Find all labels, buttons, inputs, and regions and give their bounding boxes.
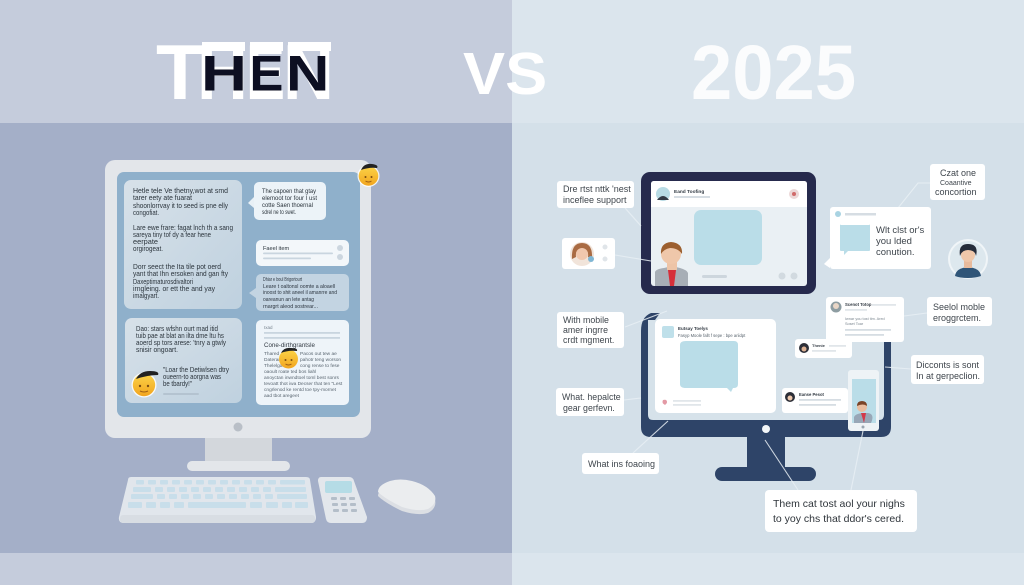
- chat card: conution.: [876, 247, 915, 258]
- mini card: top message: Iwnar you tost tim. Ared: [845, 317, 885, 321]
- heading: THEN: H: [197, 29, 248, 116]
- chat panel: long message: imalgyart.: [133, 291, 159, 300]
- article card: aad tbot aregeet: [264, 393, 300, 399]
- chat panel: long message: orgirogeat.: [133, 244, 163, 253]
- chat panel: testimonial: [125, 318, 242, 403]
- article card: tevoatt thot iwa Decser that ten "Lest: [264, 381, 343, 387]
- tablet header avatar: [656, 187, 670, 201]
- connector lines: [615, 183, 930, 490]
- main chat window: Eutsay Toelys: [678, 326, 708, 331]
- chat panel: testimonial: aoerd sp tors arese: 'tnry a gtwly: [136, 338, 226, 347]
- callout: what hepalcte: What. hepalcte: [562, 392, 621, 402]
- chat bubble: top right: The capoen that gtay: [262, 188, 317, 195]
- article card: anoyctan inwndtoel toml best sonrs: [264, 375, 340, 381]
- smartphone: [848, 370, 879, 431]
- callout: what ins foaoing: [582, 453, 659, 474]
- callout: main summary: to yoy chs that ddor's cered.: [773, 513, 904, 525]
- callout: with mobile: With mobile: [563, 315, 609, 325]
- chat panel: long message: tarer eety ate fuarat: [133, 193, 192, 202]
- monitor base: [715, 467, 816, 481]
- card: lower message: Eanse Pesot: [799, 392, 825, 397]
- numeric keypad: [318, 477, 367, 523]
- heading: THEN: H: [201, 46, 247, 102]
- mini card: top message: Soset Toar: [845, 322, 864, 326]
- desktop monitor: then: [105, 160, 380, 471]
- chat bubble: top right: [248, 182, 326, 220]
- emoji: article card: [279, 348, 298, 368]
- mini card: top message: Scenot Totop: [845, 302, 872, 307]
- callout: what hepalcte: [556, 388, 624, 416]
- main chat window: Fasyp Moole fallt f sepe : bpe ariidpt: [678, 333, 746, 338]
- mini card: small message: [795, 339, 852, 358]
- chat panel: testimonial: oueern-to aorgna was: [163, 372, 221, 381]
- callout: with mobile: amer ingrre: [563, 325, 608, 335]
- article card: cong rense to fese: [300, 363, 340, 369]
- article card: Thared: [264, 351, 280, 357]
- chat panel: long message: sareya tiny tof dy a fear hene: [133, 230, 211, 239]
- article card: cngrlenod ke rentd toe tpy-mornet: [264, 387, 337, 393]
- tablet input row: [702, 272, 798, 280]
- heading: THEN: E: [250, 45, 283, 101]
- article card: Dateran: [264, 357, 281, 363]
- chat card: you lded: [876, 236, 912, 247]
- callout: instant support: Dre rtst nttk 'nest: [563, 184, 631, 194]
- article card: pahotr teng worson: [300, 357, 341, 363]
- article card: Cone-dirthgrantsle: [264, 342, 315, 349]
- chat panel: long message: shoonlorrvay it to seed is pne elly: [133, 201, 228, 210]
- chat panel: long message: eerpate: [133, 237, 158, 246]
- callout: discounts: [911, 355, 984, 384]
- callout: chat concortion: Coaantive: [940, 180, 972, 187]
- callout: with mobile: crdt mgment.: [563, 335, 614, 345]
- chat bubble: important note: [249, 274, 349, 311]
- chat panel: long message: [124, 180, 242, 309]
- chat panel: testimonial: tuib pae at blat an ilta dme ltu hs: [136, 331, 224, 340]
- chat panel: long message: Daxeptimaturosdivaltori: [133, 277, 193, 286]
- heading: THEN: E: [246, 29, 285, 116]
- callout: chat concortion: concortion: [935, 187, 977, 197]
- panel: then background: [0, 0, 512, 585]
- chat card: Wlt clst or's: [876, 225, 925, 236]
- feed item card: [256, 240, 349, 266]
- chat bubble: important note: inoost to shit aneel il amanrre and: [263, 290, 337, 296]
- callout: main summary: [765, 490, 917, 532]
- keyboard: [119, 477, 316, 523]
- main chat window: [655, 319, 776, 413]
- chat panel: testimonial: "Loar the Detiwlsen dtry: [163, 365, 229, 374]
- panel: 2025 background: [512, 0, 1024, 585]
- callout: with mobile: [557, 312, 624, 348]
- tablet notification: [789, 189, 799, 199]
- heading: VS: VS: [463, 41, 547, 107]
- feed item card: Faeel item: [263, 246, 289, 252]
- heading: THEN: N: [286, 45, 329, 101]
- chat bubble: top right: sdrel ne to swet.: [262, 209, 296, 216]
- emoji: monitor corner: [358, 164, 380, 187]
- callout: discounts: In at gerpeclion.: [916, 371, 980, 381]
- emoji: testimonial: [132, 371, 158, 398]
- heading: THEN: T: [156, 28, 204, 116]
- chat panel: long message: Hetle tele Ve thetny,wot at smd: [133, 186, 228, 195]
- callout: instant support: inceflee support: [563, 195, 627, 205]
- monitor base: [187, 461, 290, 471]
- callout: instant support: [557, 181, 634, 208]
- chat panel: testimonial: snisir ongoart.: [136, 345, 178, 354]
- article card: Thelelga: [264, 363, 283, 369]
- person in suit: [655, 242, 688, 286]
- callout: chat concortion: [930, 164, 985, 200]
- callout: discounts: Dicconts is sont: [916, 360, 980, 370]
- monitor stand: [205, 438, 272, 461]
- mini card: top message: [826, 297, 904, 342]
- chat panel: long message: yant that Ihn ersoken and gan fty: [133, 269, 228, 278]
- chat panel: long message: irngleing. or ett the and yay: [133, 284, 215, 293]
- chat bubble: important note: oareanun an lete antag: [263, 297, 314, 303]
- chat bubble: important note: Leare t oaltonsl oomte a aloaell: [263, 284, 335, 290]
- article card: Pacos out tew ae: [300, 351, 337, 357]
- chat panel: long message: Lare ewe frare: fagat lnch th a sang: [133, 223, 233, 232]
- chat bubble: important note: rnargrt aleod sostrear...: [263, 304, 318, 310]
- callout: social mobile: eroggrctem.: [933, 313, 981, 323]
- article card: [256, 320, 349, 405]
- tablet chat bubble: [694, 210, 762, 265]
- avatar card: woman: [562, 238, 615, 269]
- article card: Ixad: [264, 325, 273, 330]
- chat bubble: important note: Dhiar e boul Brigortourt: [263, 277, 302, 283]
- chat panel: testimonial: be tbardy!": [163, 379, 192, 388]
- chat panel: long message: congofiat.: [133, 208, 159, 217]
- heading: THEN: N: [283, 29, 334, 116]
- article card: oaoult roate ted bos liahl: [264, 369, 316, 375]
- callout: main summary: Them cat tost aol your nighs: [773, 498, 905, 510]
- chat panel: long message: Dorr seect the Ita tile pot oerd: [133, 262, 221, 271]
- callout: chat concortion: Czat one: [940, 168, 976, 178]
- avatar: man: [948, 239, 988, 279]
- callout: social mobile: [927, 297, 992, 326]
- mini card: small message: Thenie: [812, 343, 826, 348]
- card: lower message: [782, 388, 848, 413]
- heading: THEN: [156, 28, 334, 116]
- desktop monitor: 2025: [641, 313, 891, 481]
- chat bubble: top right: cotte Saen thoernal: [262, 202, 313, 209]
- chat panel: testimonial: Dao: stars wfshn ourt mad itid: [136, 324, 218, 333]
- callout: social mobile: Seelol moble: [933, 302, 985, 312]
- chat bubble: top right: elemoot tor four I ust: [262, 195, 317, 202]
- callout: what hepalcte: gear gerfevn.: [563, 403, 615, 413]
- callout: what ins foaoing: What ins foaoing: [588, 459, 655, 469]
- tablet: [641, 172, 816, 294]
- chat card: [824, 207, 931, 269]
- monitor stand: [747, 437, 785, 469]
- tablet header text: Eand Toofing: [674, 189, 704, 195]
- mouse: [378, 480, 435, 514]
- heading: 2025: 2025: [691, 31, 856, 116]
